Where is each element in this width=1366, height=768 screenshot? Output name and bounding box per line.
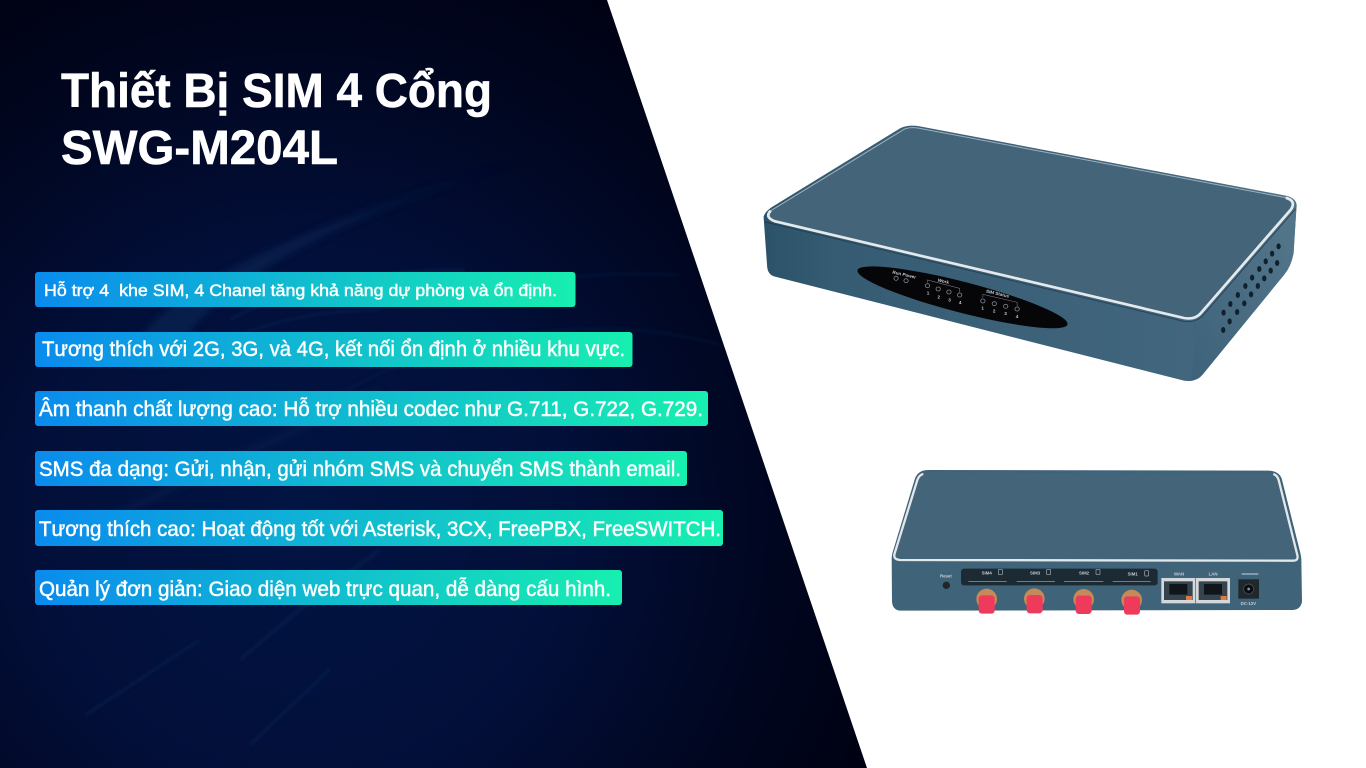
feature 1: SIM slots [35,272,576,307]
panel: dark background [0,0,867,768]
led window: Run Power [892,270,917,280]
side vents [1221,243,1281,333]
feature 2: network compatibility: Tương thích với 2G, 3G, và 4G, kết nối ổn định ở nhiều khu vực. [42,338,625,361]
led window [853,255,1072,339]
WAN and LAN ports: WAN [1174,571,1184,576]
device: front view [764,126,1297,381]
led window: Work [937,278,950,285]
feature 5: compatibility: Tương thích cao: Hoạt động tốt với Asterisk, 3CX, FreePBX, FreeSWITCH. [39,518,721,541]
feature 5: compatibility [35,510,723,546]
reset button [940,573,952,589]
led window: 1 [927,290,930,295]
led window: 3 [948,298,951,303]
feature 6: management: Quản lý đơn giản: Giao diện web trực quan, dễ dàng cấu hình. [39,578,611,601]
feature 4: SMS: SMS đa dạng: Gửi, nhận, gửi nhóm SMS và chuyển SMS thành email. [39,458,681,481]
led window: 2 [993,308,996,313]
led window: 2 [937,294,941,299]
WAN and LAN ports: LAN [1209,571,1218,576]
led window: 1 [981,305,985,310]
WAN and LAN ports [1161,571,1230,603]
feature 2: network compatibility [35,332,632,367]
device: rear view [892,470,1302,615]
led window: 4 [959,300,962,305]
led window: 3 [1004,311,1007,316]
led window: SIM Status [985,289,1010,299]
led window: 4 [1016,314,1019,319]
sim slots: SIM2 [1079,571,1090,576]
sim slots: SIM3 [1030,571,1041,576]
title [61,65,492,175]
sim slots: SIM1 [1128,571,1138,576]
sim slots: SIM4 [982,571,992,576]
feature 1: SIM slots: Hỗ trợ 4 khe SIM, 4 Chanel tăng khả năng dự phòng và ổn định. [44,281,557,300]
title: SWG-M204L [61,122,338,175]
antenna connectors [976,588,1142,615]
feature 3: audio quality [35,391,708,426]
sim slots [961,569,1158,585]
power jack [1238,574,1259,606]
feature 3: audio quality: Âm thanh chất lượng cao: Hỗ trợ nhiều codec như G.711, G.722, G.729. [39,398,703,421]
feature 6: management [35,570,622,605]
feature 4: SMS [35,451,687,486]
reset button: Reset [940,573,952,578]
power jack: DC-12V [1241,601,1256,606]
title: Thiết Bị SIM 4 Cổng [61,65,492,118]
